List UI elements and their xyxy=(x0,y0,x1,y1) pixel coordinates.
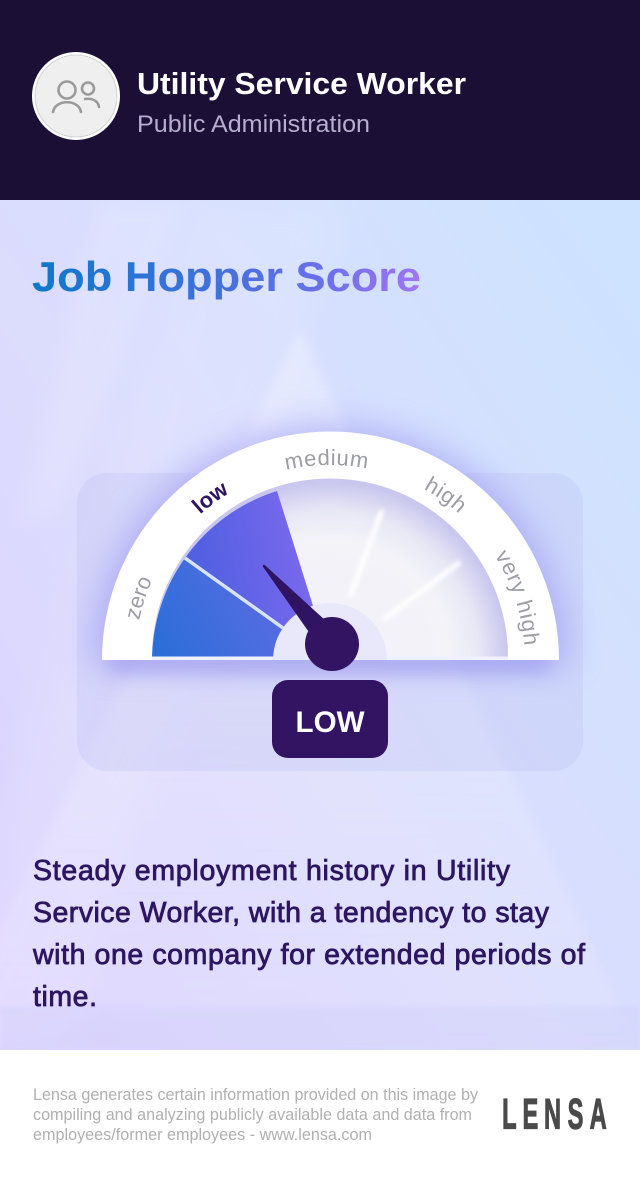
header band xyxy=(0,0,640,200)
baseline strip xyxy=(152,656,508,660)
description xyxy=(32,855,585,1013)
logo: LENSA xyxy=(502,1091,607,1138)
disclaimer: compiling and analyzing publicly available data and data from xyxy=(33,1106,472,1124)
gauge backing card xyxy=(77,473,583,771)
description: Service Worker, with a tendency to stay xyxy=(33,897,550,929)
hub halo xyxy=(273,603,387,660)
footer xyxy=(0,1050,640,1178)
zero segment xyxy=(152,558,284,656)
level badge xyxy=(272,680,388,758)
needle xyxy=(264,566,322,630)
gauge xyxy=(81,410,579,684)
description: with one company for extended periods of xyxy=(32,939,585,971)
description: time. xyxy=(33,981,97,1013)
disclaimer: Lensa generates certain information provided on this image by xyxy=(33,1086,479,1104)
score title: Job Hopper Score xyxy=(32,253,421,300)
background panel xyxy=(0,200,640,1050)
hub xyxy=(305,617,359,671)
disclaimer: employees/former employees - www.lensa.com xyxy=(33,1126,372,1144)
sector: Public Administration xyxy=(137,111,370,138)
label: low: low xyxy=(190,483,227,514)
label: medium: medium xyxy=(285,449,367,470)
faint divider high/very high xyxy=(383,562,460,620)
job title: Utility Service Worker xyxy=(137,66,466,101)
dial face xyxy=(102,432,559,660)
label: zero: zero xyxy=(128,578,150,620)
label: high: high xyxy=(424,476,464,513)
label: very high: very high xyxy=(497,550,540,644)
avatar xyxy=(32,52,120,140)
empty sector xyxy=(152,479,508,656)
disclaimer xyxy=(33,1086,479,1144)
segment divider xyxy=(185,558,283,628)
faint divider medium/high xyxy=(350,510,382,597)
low segment xyxy=(185,491,330,660)
level badge: LOW xyxy=(296,706,365,739)
description: Steady employment history in Utility xyxy=(33,855,511,887)
